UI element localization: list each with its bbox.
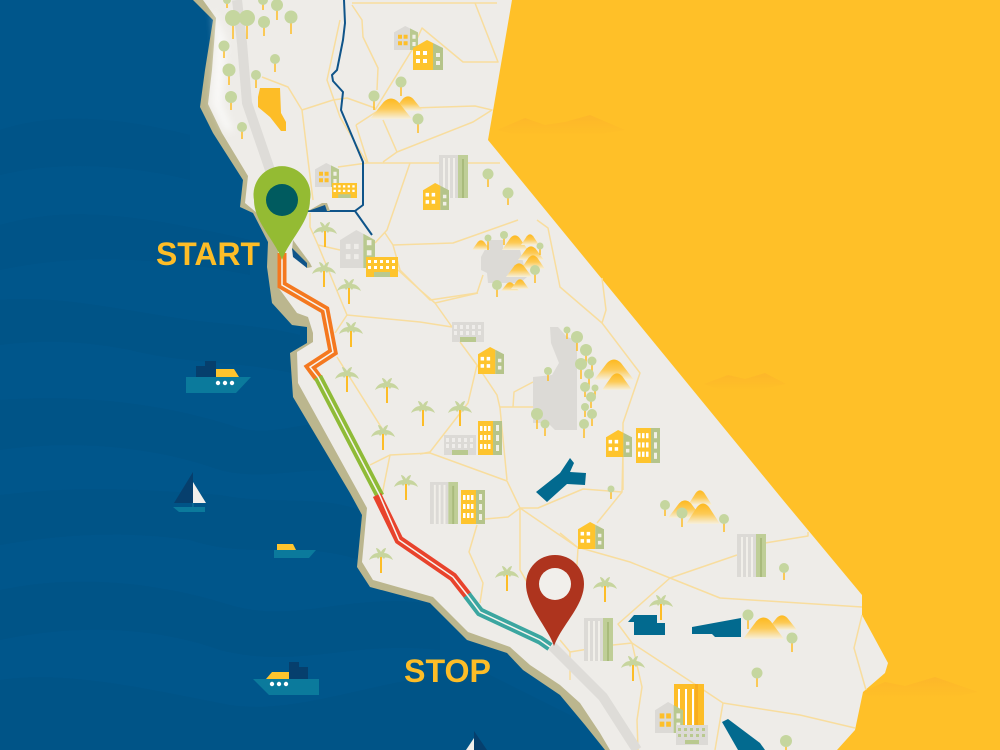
sailboat: bottom edge — [466, 731, 487, 750]
small boat — [274, 544, 316, 558]
stop pin — [526, 555, 584, 646]
start label: START — [156, 236, 260, 272]
inland yellow mound shadows — [497, 115, 978, 698]
highway — [237, 0, 637, 750]
cargo ship: upper — [186, 361, 251, 393]
mountains — [370, 96, 797, 639]
trees — [218, 0, 798, 750]
palm trees — [312, 222, 673, 681]
stop label: STOP — [404, 653, 491, 689]
gray urban areas — [481, 240, 577, 430]
river — [308, 0, 372, 235]
sailboat — [173, 472, 206, 512]
sea — [0, 0, 650, 750]
cargo ship: lower — [253, 662, 319, 695]
start pin — [254, 166, 310, 260]
bays — [292, 203, 330, 268]
roads — [262, 3, 866, 750]
route — [282, 253, 550, 647]
coastal haze — [212, 8, 234, 132]
buildings — [315, 26, 766, 745]
coast rim — [193, 0, 650, 750]
yellow lake — [258, 88, 286, 131]
land — [203, 0, 888, 750]
teal reservoirs — [536, 458, 765, 750]
